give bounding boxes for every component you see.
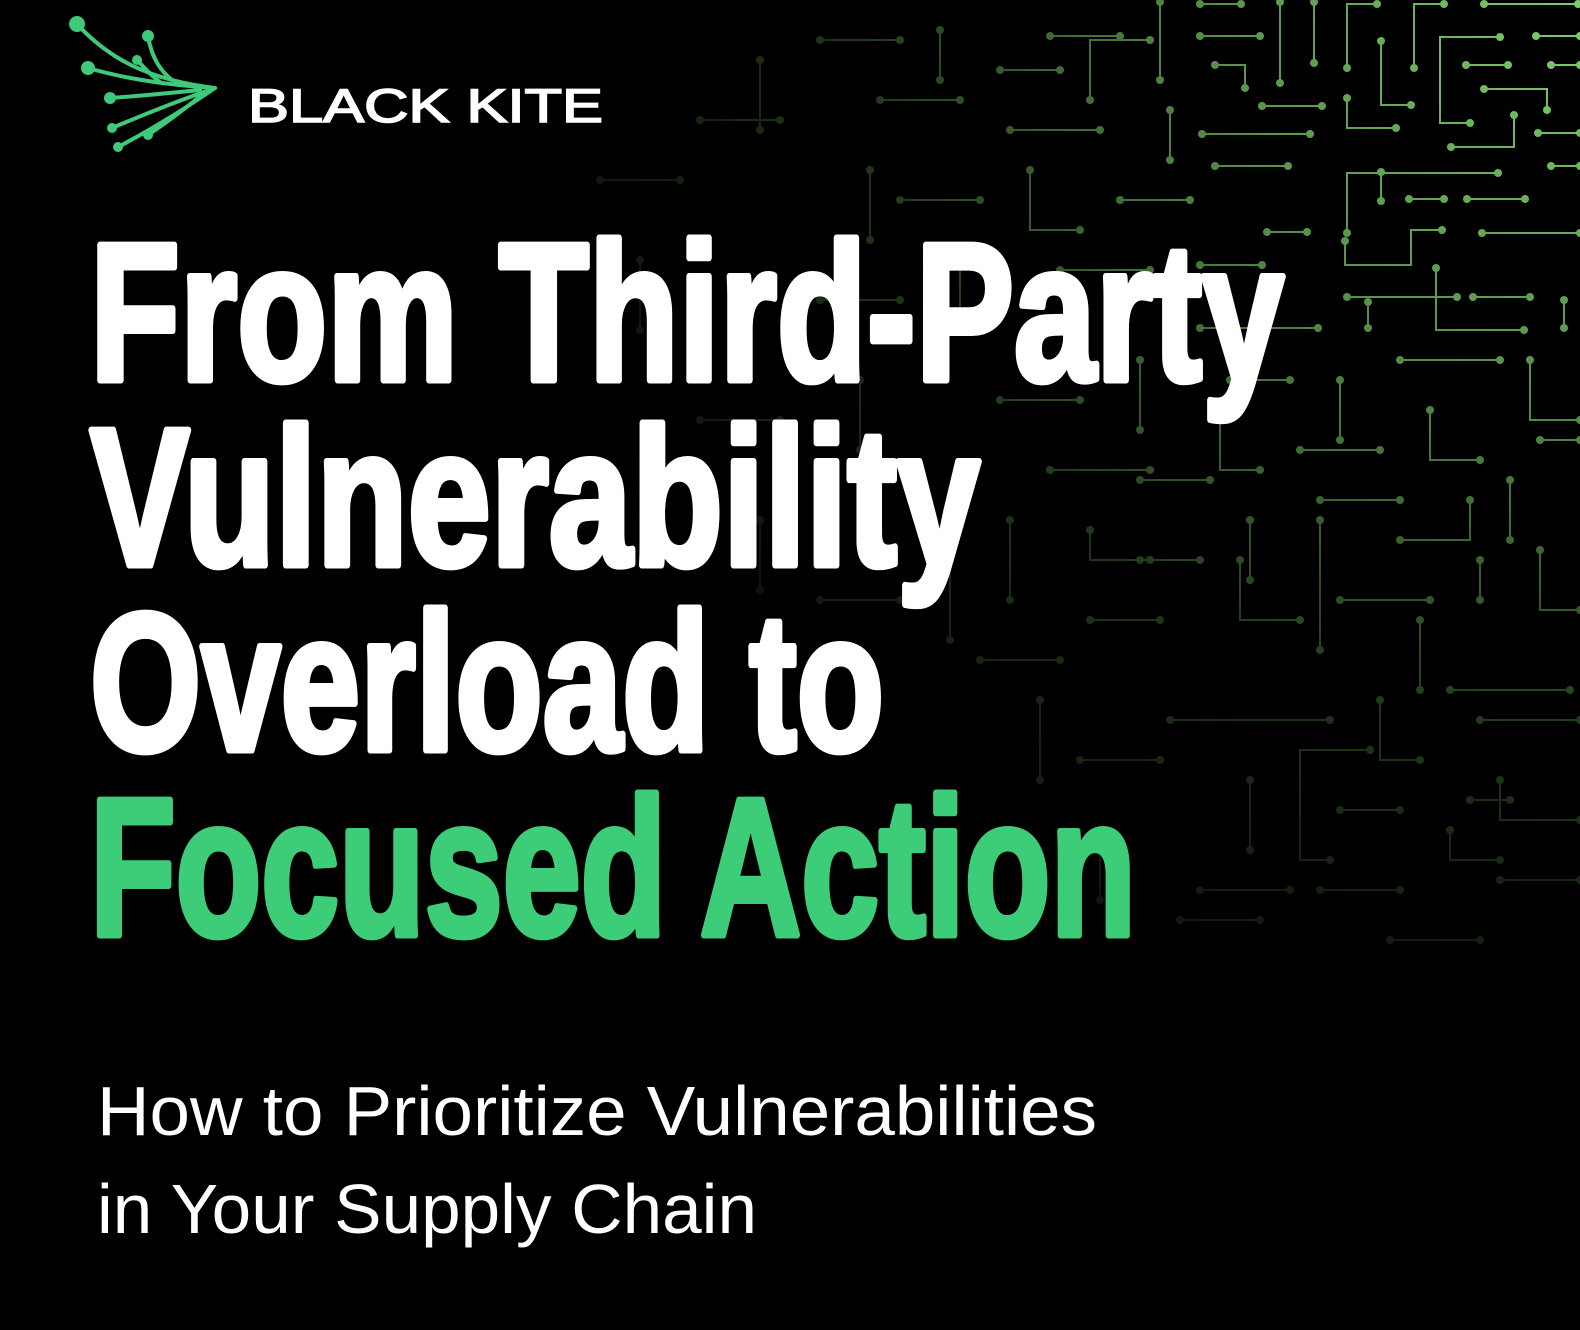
logo: [69, 16, 603, 152]
title: Focused Action: [90, 758, 1136, 977]
subtitle: How to Prioritize Vulnerabilities: [97, 1072, 1097, 1150]
background circuit pattern: [600, 2, 1580, 940]
subtitle: [97, 1072, 1097, 1248]
title: [90, 203, 1284, 977]
logo wordmark: BLACK KITE: [248, 79, 603, 132]
icon: kite: [69, 16, 215, 152]
title: Overload to: [90, 573, 884, 792]
title: Vulnerability: [90, 388, 980, 607]
subtitle: in Your Supply Chain: [97, 1170, 757, 1248]
